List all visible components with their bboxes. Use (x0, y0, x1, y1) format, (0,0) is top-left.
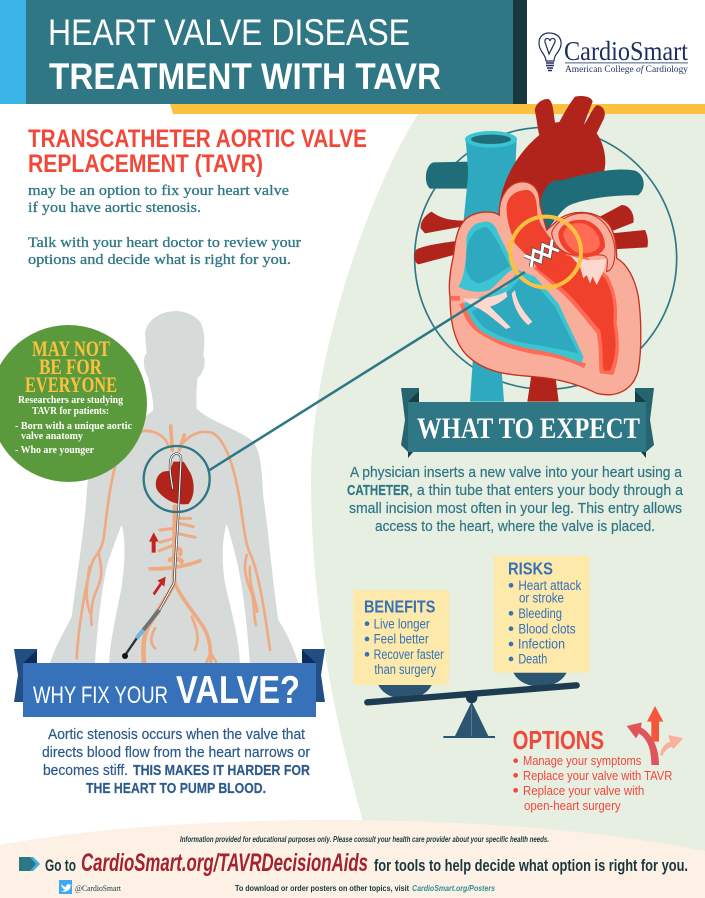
panel: options (513, 706, 683, 813)
icon: light bulb (539, 33, 561, 70)
panel: may not be for everyone (0, 325, 147, 482)
body illustration (50, 311, 298, 663)
intro text: if you have aortic stenosis. (28, 200, 201, 216)
ribbon: what to expect: WHAT TO EXPECT (417, 412, 640, 445)
text: why fix your valve: Aortic stenosis occurs when the valve that (48, 726, 306, 743)
CardioSmart logo: CardioSmart (564, 36, 688, 66)
icon: arrow tag (19, 857, 40, 871)
mitral valve leaflets (570, 255, 607, 285)
left ventricle (533, 250, 619, 375)
callout heading: EVERYONE (25, 372, 117, 397)
right atrium (458, 222, 515, 292)
right red vessels (597, 205, 648, 249)
panel: options: open-heart surgery (524, 798, 621, 813)
catheter (159, 454, 181, 610)
magnifier circle (144, 446, 210, 512)
call to action (45, 849, 688, 877)
title line 2: TREATMENT WITH TAVR (49, 56, 441, 97)
panel: risks: Heart attack (518, 578, 581, 593)
right ventricle wall band (451, 298, 585, 366)
ribbon: why fix your valve (14, 649, 325, 717)
left pulmonary veins (426, 162, 468, 189)
descending vessels (470, 353, 504, 402)
callout heading: BE FOR (39, 354, 103, 379)
panel: risks: Blood clots (518, 621, 576, 636)
text: what to expect: access to the heart, where the valve is placed. (375, 518, 655, 535)
heart illustration (414, 96, 677, 402)
panel: balance scale (353, 556, 683, 813)
callout text: - Born with a unique aortic (15, 420, 132, 432)
twitter handle: @CardioSmart (75, 884, 122, 893)
CardioSmart logo: American College of Cardiology (565, 64, 688, 75)
left red vessels (414, 212, 465, 264)
callout text (15, 394, 132, 456)
panel: risks: or stroke (519, 591, 564, 606)
call to action: CardioSmart.org/TAVRDecisionAids (81, 849, 368, 877)
disclaimer: Information provided for educational purposes only. Please consult your health care provider about your specific health needs. (180, 835, 549, 844)
CardioSmart logo (539, 33, 688, 75)
background: pale green panel (311, 114, 705, 860)
panel: risks: Infection (518, 637, 565, 652)
title line 1: HEART VALVE DISEASE (48, 12, 410, 53)
icon: twitter (59, 880, 72, 894)
heading: TAVR: REPLACEMENT (TAVR) (28, 150, 263, 178)
scale pans (378, 673, 567, 699)
panel: options: Manage your symptoms (523, 753, 642, 768)
callout text: TAVR for patients: (32, 405, 109, 417)
superior vena cava (463, 139, 517, 223)
intro text (28, 183, 301, 268)
right ventricle (463, 270, 583, 363)
text: what to expect: , a thin tube that enters your body through a (409, 482, 684, 499)
ribbon: what to expect (401, 388, 654, 458)
valve stent (524, 240, 559, 267)
panel: risks: Death (518, 652, 547, 667)
arteries (77, 426, 270, 663)
heart outer wall (449, 182, 641, 395)
callout text: valve anatomy (21, 430, 83, 442)
panel: benefits: Live longer (374, 616, 430, 631)
chordae tendineae (463, 290, 532, 329)
blood flow arrow diagonal (153, 577, 166, 595)
heading: TAVR (28, 125, 367, 178)
panel: benefits: Recover faster (374, 647, 444, 662)
small heart (156, 462, 194, 504)
text: what to expect: A physician inserts a new valve into your heart using a (350, 464, 683, 481)
text: why fix your valve (42, 726, 310, 797)
callout text: Researchers are studying (18, 394, 123, 406)
panel: benefits: than surgery (374, 662, 436, 677)
scale beam (367, 685, 577, 702)
panel: benefits: Feel better (374, 632, 429, 647)
panel: options: Replace your valve with (523, 783, 644, 798)
blood flow arrow up (149, 532, 159, 553)
header banner (0, 0, 705, 114)
left atrium (552, 213, 615, 272)
callout heading: MAY NOT (32, 336, 110, 361)
poster download text: To download or order posters on other topics, visit (235, 883, 409, 893)
footer band (0, 820, 705, 898)
panel: risks: RISKS (508, 559, 553, 579)
callout text: - Who are younger (15, 444, 94, 456)
poster download text: CardioSmart.org/Posters (412, 883, 495, 893)
text: why fix your valve: THIS MAKES IT HARDER FOR (133, 762, 310, 779)
connector line (208, 272, 525, 471)
yellow focus ring (510, 217, 581, 287)
heading: TAVR: TRANSCATHETER AORTIC VALVE (28, 125, 367, 153)
call to action: Go to (45, 856, 76, 875)
text: why fix your valve: THE HEART TO PUMP BLOOD. (86, 780, 266, 797)
intro text: options and decide what is right for you. (28, 252, 291, 268)
text: what to expect (347, 464, 684, 535)
scale fulcrum (443, 692, 495, 738)
large circle (415, 127, 677, 389)
text: why fix your valve: becomes stiff. (43, 762, 128, 779)
callout heading (25, 336, 117, 397)
ribbon: why fix your valve: VALVE? (176, 669, 300, 712)
icon: direction arrows (627, 706, 683, 765)
footer text (19, 835, 688, 894)
intro text: may be an option to fix your heart valve (28, 183, 289, 199)
panel: risks (494, 556, 589, 673)
text: what to expect: small incision most often in your leg. This entry allows (349, 500, 682, 517)
panel: risks: Bleeding (518, 606, 562, 621)
ribbon: why fix your valve: WHY FIX YOUR (33, 682, 168, 709)
body silhouette (50, 311, 298, 663)
right pulmonary artery (540, 169, 644, 230)
panel: benefits: BENEFITS (364, 597, 435, 617)
aortic root chamber (507, 190, 567, 270)
text: what to expect: CATHETER (347, 482, 409, 499)
aorta (499, 96, 605, 207)
panel: options: Replace your valve with TAVR (523, 768, 672, 783)
text: why fix your valve: directs blood flow from the heart narrows or (42, 744, 310, 761)
intro text: Talk with your heart doctor to review your (28, 235, 301, 251)
catheter handle (122, 610, 159, 659)
panel: benefits (353, 590, 449, 685)
panel: options: OPTIONS (513, 725, 604, 755)
